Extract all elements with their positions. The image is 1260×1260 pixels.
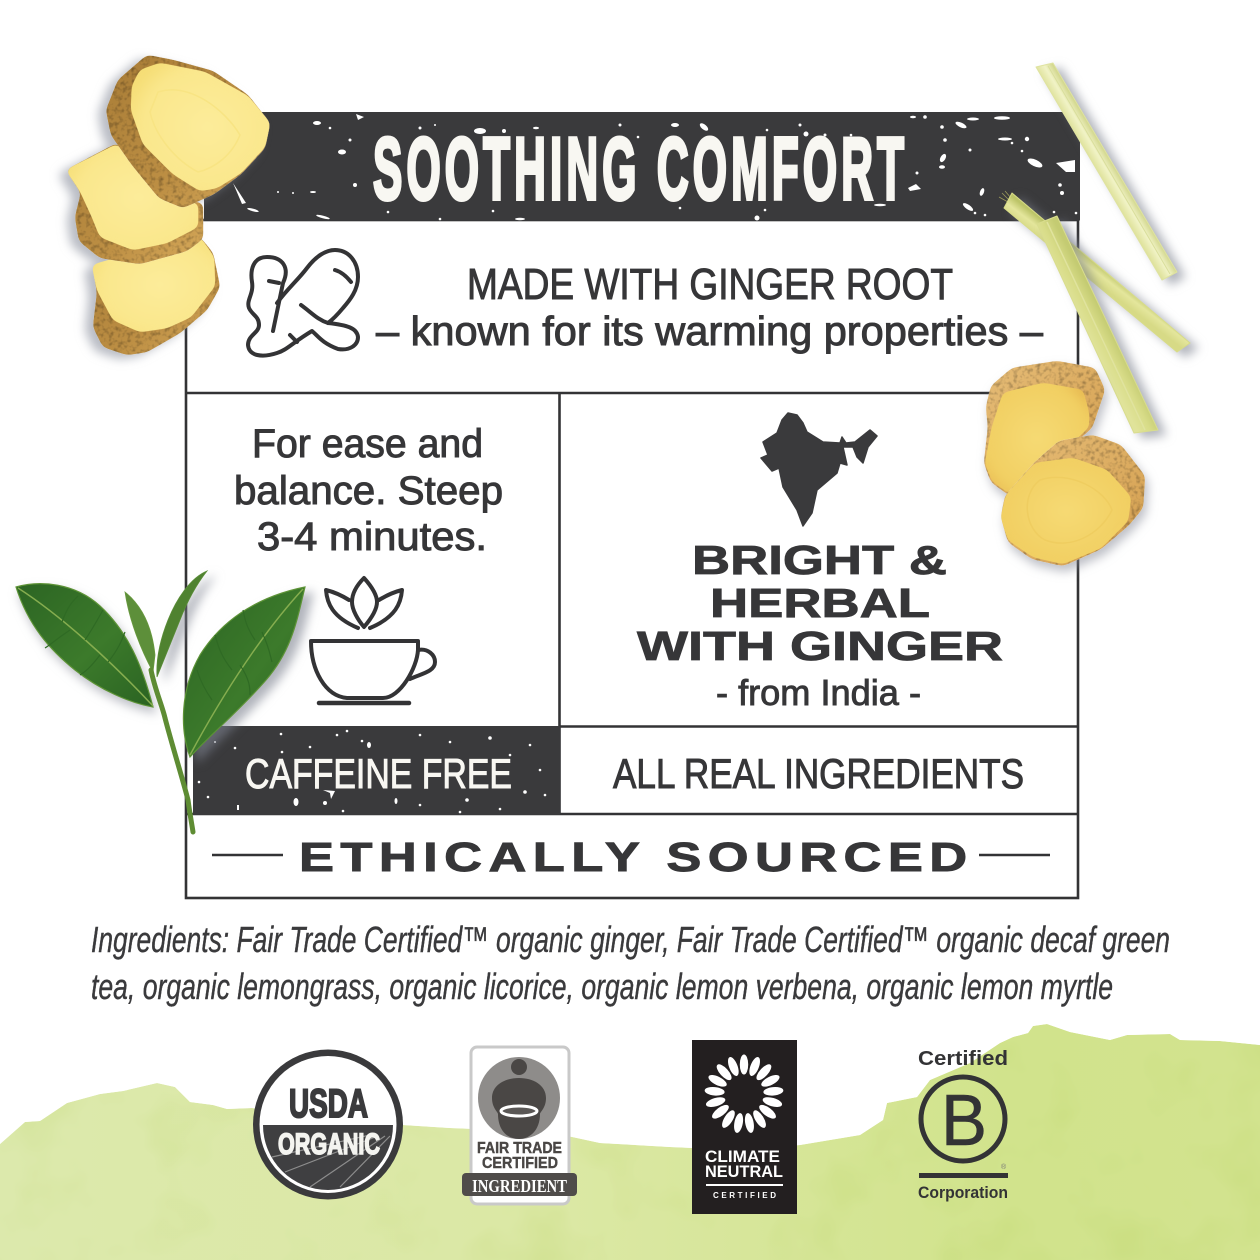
lemongrass stalk front	[1037, 216, 1158, 433]
badge: USDA organic: ORGANIC	[278, 1128, 380, 1161]
flavor text	[637, 537, 1003, 669]
caffeine free text: CAFFEINE FREE	[245, 750, 512, 797]
panel: steeping	[234, 422, 503, 703]
icon: tea cup with leaves	[311, 578, 435, 703]
origin text: - from India -	[716, 672, 921, 713]
tea stem	[151, 670, 193, 832]
ginger slice middle	[66, 143, 203, 264]
panel: ginger root claim	[248, 250, 1043, 356]
badge: fair trade certified: INGREDIENT	[472, 1176, 567, 1196]
badge: certified B corporation: B	[941, 1081, 987, 1161]
ginger claim text: – known for its warming properties –	[376, 308, 1043, 354]
badge: fair trade certified: FAIR TRADE	[477, 1140, 562, 1157]
badge: certified B corporation: Corporation	[918, 1183, 1008, 1202]
tea leaf left	[16, 584, 153, 707]
lemongrass stalk crossing	[999, 191, 1190, 352]
photo: ginger slices top left	[66, 55, 270, 355]
flavor text: WITH GINGER	[637, 623, 1003, 669]
tea shoot small leaf	[125, 592, 155, 672]
icon: map of India	[761, 413, 877, 526]
badge: certified B corporation	[918, 1048, 1008, 1202]
lemongrass stalk upper	[1036, 63, 1177, 280]
tea leaf right	[183, 587, 305, 757]
header banner	[204, 112, 1080, 220]
badge: climate neutral certified: NEUTRAL	[705, 1162, 783, 1181]
badge: certified B corporation: Certified	[918, 1048, 1008, 1070]
photo: tea sprig	[16, 571, 305, 832]
steeping text: 3-4 minutes.	[257, 515, 487, 559]
badge: climate neutral certified	[692, 1040, 797, 1214]
caffeine free band	[193, 726, 560, 815]
badge: USDA organic	[253, 1050, 403, 1200]
steeping text	[234, 422, 503, 559]
ginger slice lower right	[1001, 435, 1145, 566]
green watercolor wash	[0, 1024, 1260, 1260]
icon: sun rays	[704, 1054, 784, 1134]
badge: fair trade certified	[462, 1047, 577, 1204]
ginger slice bottom	[92, 237, 220, 355]
ginger claim text: MADE WITH GINGER ROOT	[467, 260, 953, 309]
photo: lemongrass stalks	[999, 63, 1190, 433]
all real ingredients text: ALL REAL INGREDIENTS	[613, 750, 1024, 797]
ethically sourced row: ETHICALLY SOURCED	[299, 834, 967, 880]
badge: climate neutral certified: CLIMATE	[705, 1147, 780, 1166]
ingredients text	[91, 919, 1170, 1007]
panel: label frame	[186, 220, 1078, 898]
title: SOOTHING COMFORT	[373, 119, 904, 218]
flavor text: BRIGHT &	[692, 537, 947, 583]
ginger claim text	[376, 260, 1043, 354]
badge: USDA organic: USDA	[289, 1082, 368, 1126]
flavor text: HERBAL	[710, 580, 930, 626]
badge: fair trade certified: CERTIFIED	[482, 1155, 558, 1172]
badge: climate neutral certified: CERTIFIED	[713, 1191, 776, 1200]
steeping text: balance. Steep	[234, 469, 503, 513]
badge: certified B corporation: ®	[1001, 1163, 1007, 1171]
ginger slice top	[106, 55, 270, 208]
tea bud	[157, 571, 207, 677]
icon: ginger root	[248, 250, 358, 356]
steeping text: For ease and	[252, 422, 483, 466]
panel: flavor and origin	[637, 413, 1003, 713]
ginger slice upper right	[984, 361, 1105, 496]
photo: ginger slices right	[984, 361, 1145, 566]
